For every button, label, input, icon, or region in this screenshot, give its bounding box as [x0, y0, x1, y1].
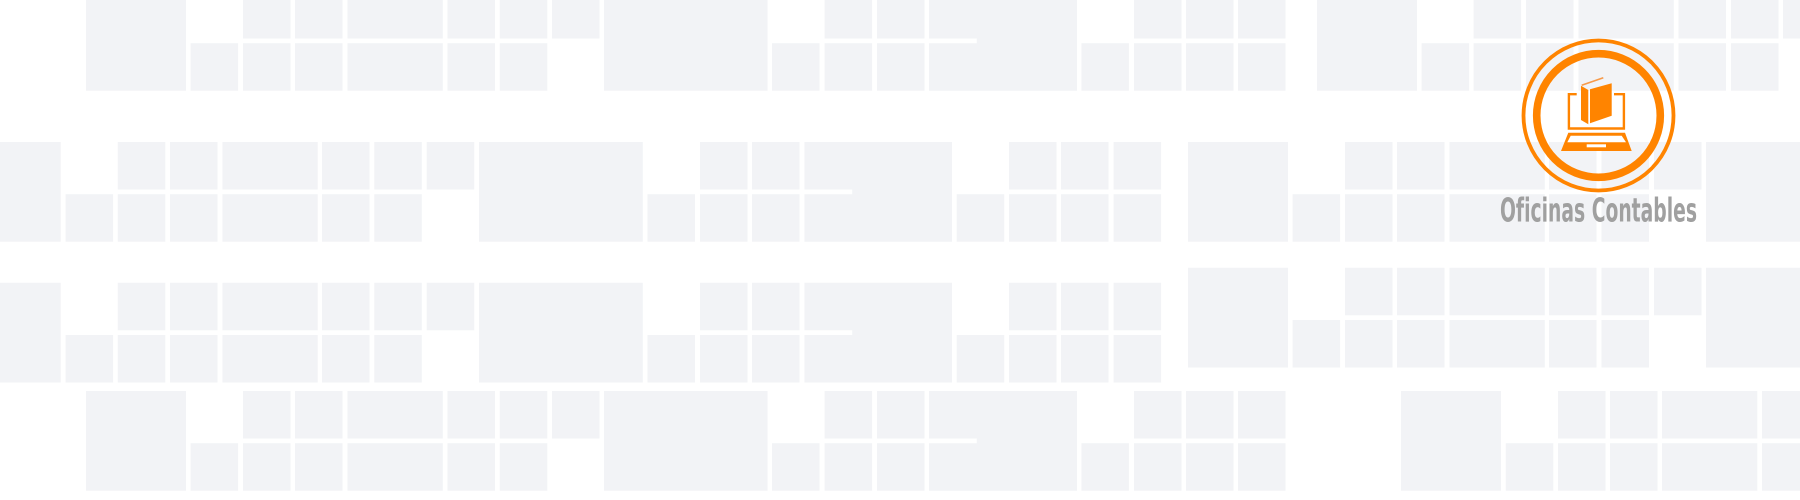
- background tile row 1: [86, 0, 1800, 91]
- background tile row 2: [0, 142, 1800, 242]
- background tile row 3, left part: [0, 283, 1161, 382]
- logo: Oficinas Contables: [1500, 40, 1697, 230]
- icon: laptop: [1561, 94, 1632, 151]
- icon: double ring: [1524, 40, 1674, 190]
- background tile row 4: [86, 391, 1800, 491]
- icon: book: [1581, 78, 1612, 124]
- background tile row 3, right part: [1188, 268, 1800, 368]
